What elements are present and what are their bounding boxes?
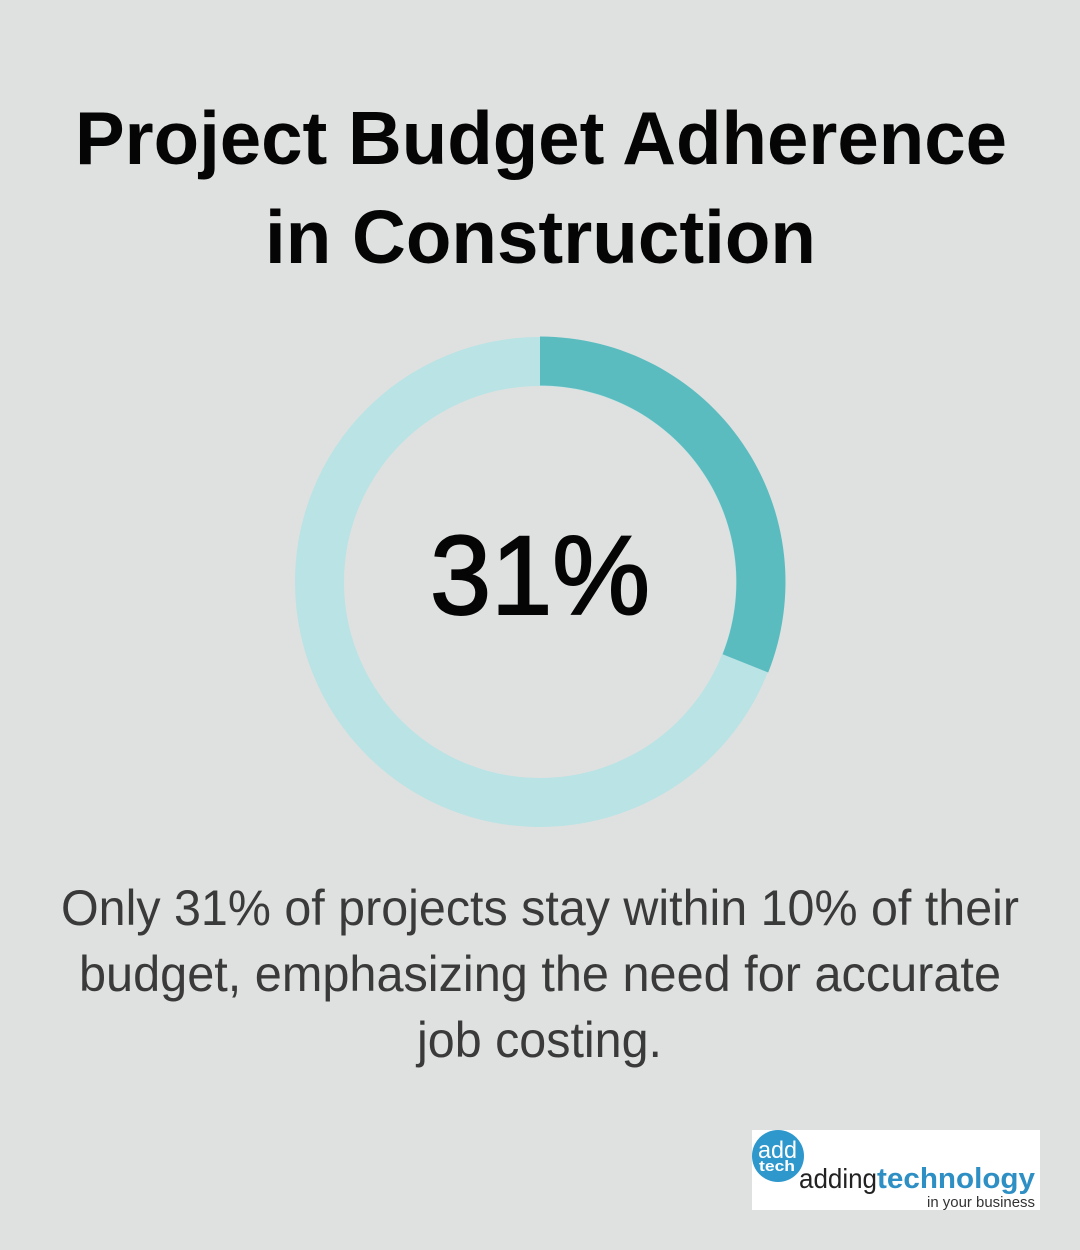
title: Project Budget Adherence xyxy=(75,96,1007,180)
description text: budget, emphasizing the need for accurate xyxy=(79,946,1001,1002)
description text: job costing. xyxy=(415,1012,662,1068)
logo: adding technology xyxy=(752,1130,1040,1211)
description text xyxy=(61,880,1019,1068)
title: in Construction xyxy=(265,195,816,279)
icon: add tech badge xyxy=(752,1130,804,1182)
title xyxy=(75,96,1007,279)
tagline: in your business xyxy=(927,1194,1035,1211)
description text: Only 31% of projects stay within 10% of their xyxy=(61,880,1019,936)
wordmark: adding xyxy=(799,1163,877,1194)
icon: add tech badge: add xyxy=(758,1137,797,1164)
center value: 31% xyxy=(430,513,650,638)
logo: adding technology: technology xyxy=(877,1163,1035,1195)
icon: add tech badge: tech xyxy=(759,1158,795,1175)
donut chart: 31% xyxy=(320,336,785,802)
